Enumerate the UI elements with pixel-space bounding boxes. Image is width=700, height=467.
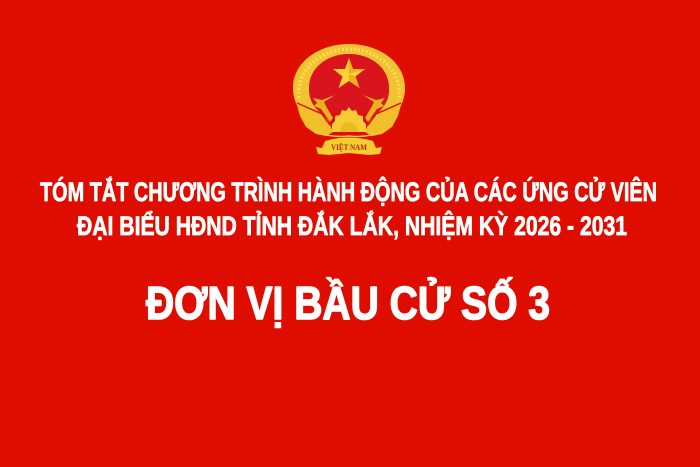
emblem cogwheel: [332, 107, 366, 132]
emblem left rice stalk: [313, 95, 335, 122]
emblem left curl: [294, 84, 299, 94]
emblem banner text: VIỆT NAM: [331, 143, 367, 152]
emblem right curl: [399, 84, 404, 94]
emblem banner: [316, 138, 382, 155]
emblem left rice sheaf: [297, 105, 333, 136]
emblem star: [333, 58, 365, 88]
subheading: ĐƠN VỊ BẦU CỬ SỐ 3: [146, 277, 550, 329]
emblem right rice sheaf: [365, 105, 401, 136]
emblem star facets: [349, 58, 365, 88]
emblem golden wreath ring: [293, 44, 405, 122]
emblem wreath grain texture: [299, 49, 399, 98]
emblem ribbon arcs: [314, 131, 384, 136]
icon: national emblem of Vietnam: [293, 44, 405, 155]
emblem left red ribbon strip: [297, 103, 330, 125]
emblem right rice stalk: [363, 95, 385, 122]
emblem cogwheel hub: [340, 122, 358, 132]
emblem right red ribbon strip: [368, 103, 401, 125]
emblem red disc: [309, 54, 389, 114]
